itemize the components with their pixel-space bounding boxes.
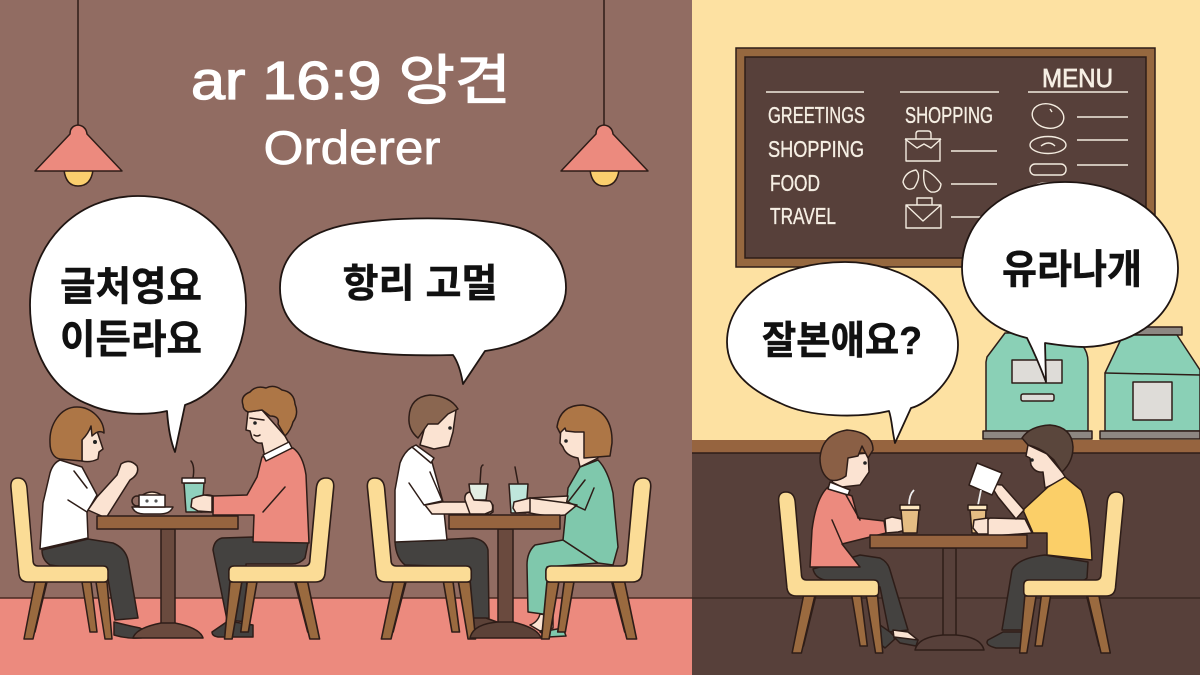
chalkboard menu	[736, 48, 1155, 267]
title: ar 16:9 앙견	[191, 51, 511, 111]
person: man in pink sweater	[191, 386, 309, 637]
scene: table three with two people	[779, 425, 1124, 653]
chalkboard menu: FOOD	[770, 170, 820, 196]
speech bubble 1	[30, 196, 246, 452]
chalkboard menu: GREETINGS	[768, 102, 865, 128]
icon: coffee cup	[132, 492, 173, 514]
scene: table two with two people	[367, 395, 651, 639]
person: woman in white shirt	[40, 407, 148, 638]
coffee machine left	[983, 333, 1092, 439]
icon: two drink cups	[465, 465, 530, 514]
chalkboard menu: TRAVEL	[770, 203, 836, 229]
chair: left	[11, 478, 112, 639]
person: woman in green scrubs	[513, 405, 618, 637]
chalkboard menu: SHOPPING	[768, 136, 864, 162]
person: man in yellow shirt	[969, 425, 1092, 648]
chair: sixth	[1020, 492, 1124, 653]
chair: fifth	[779, 492, 883, 653]
subtitle: Orderer	[264, 121, 440, 174]
scene: table one with two people	[11, 386, 334, 639]
icon: food items	[1029, 100, 1067, 197]
icon: hanging lamp left	[35, 0, 122, 186]
speech bubble 2	[280, 218, 566, 384]
speech text 5: 유라나개	[1002, 248, 1142, 292]
table	[449, 515, 560, 638]
person: woman in pink sweater	[810, 430, 918, 648]
speech text 4: 잘본애요?	[762, 320, 922, 363]
speech text 1: 글처영요	[60, 265, 202, 309]
speech text 2: 이든라요	[60, 318, 202, 362]
speech text 3: 항리 고멀	[342, 263, 498, 306]
icon: two iced coffees	[900, 490, 988, 534]
coffee machine right	[1100, 327, 1200, 439]
table	[870, 535, 1027, 650]
chalkboard menu: SHOPPING	[905, 102, 993, 128]
icon: briefcase	[906, 198, 941, 228]
chair: third	[367, 478, 476, 639]
icon: briefcase	[905, 131, 941, 161]
person: man in white shirt	[395, 395, 497, 632]
table	[97, 516, 238, 638]
speech bubble 4	[962, 182, 1178, 382]
icon: slippers	[903, 170, 941, 192]
panel: left cafe scene	[0, 0, 692, 675]
icon: hanging lamp right	[561, 0, 648, 186]
chalkboard menu: MENU	[1042, 63, 1113, 93]
icon: drink cup	[182, 461, 212, 512]
speech bubble 3	[727, 262, 958, 443]
chair: fourth	[542, 478, 651, 639]
chair: second	[225, 478, 334, 639]
panel: right cafe scene	[692, 0, 1200, 675]
